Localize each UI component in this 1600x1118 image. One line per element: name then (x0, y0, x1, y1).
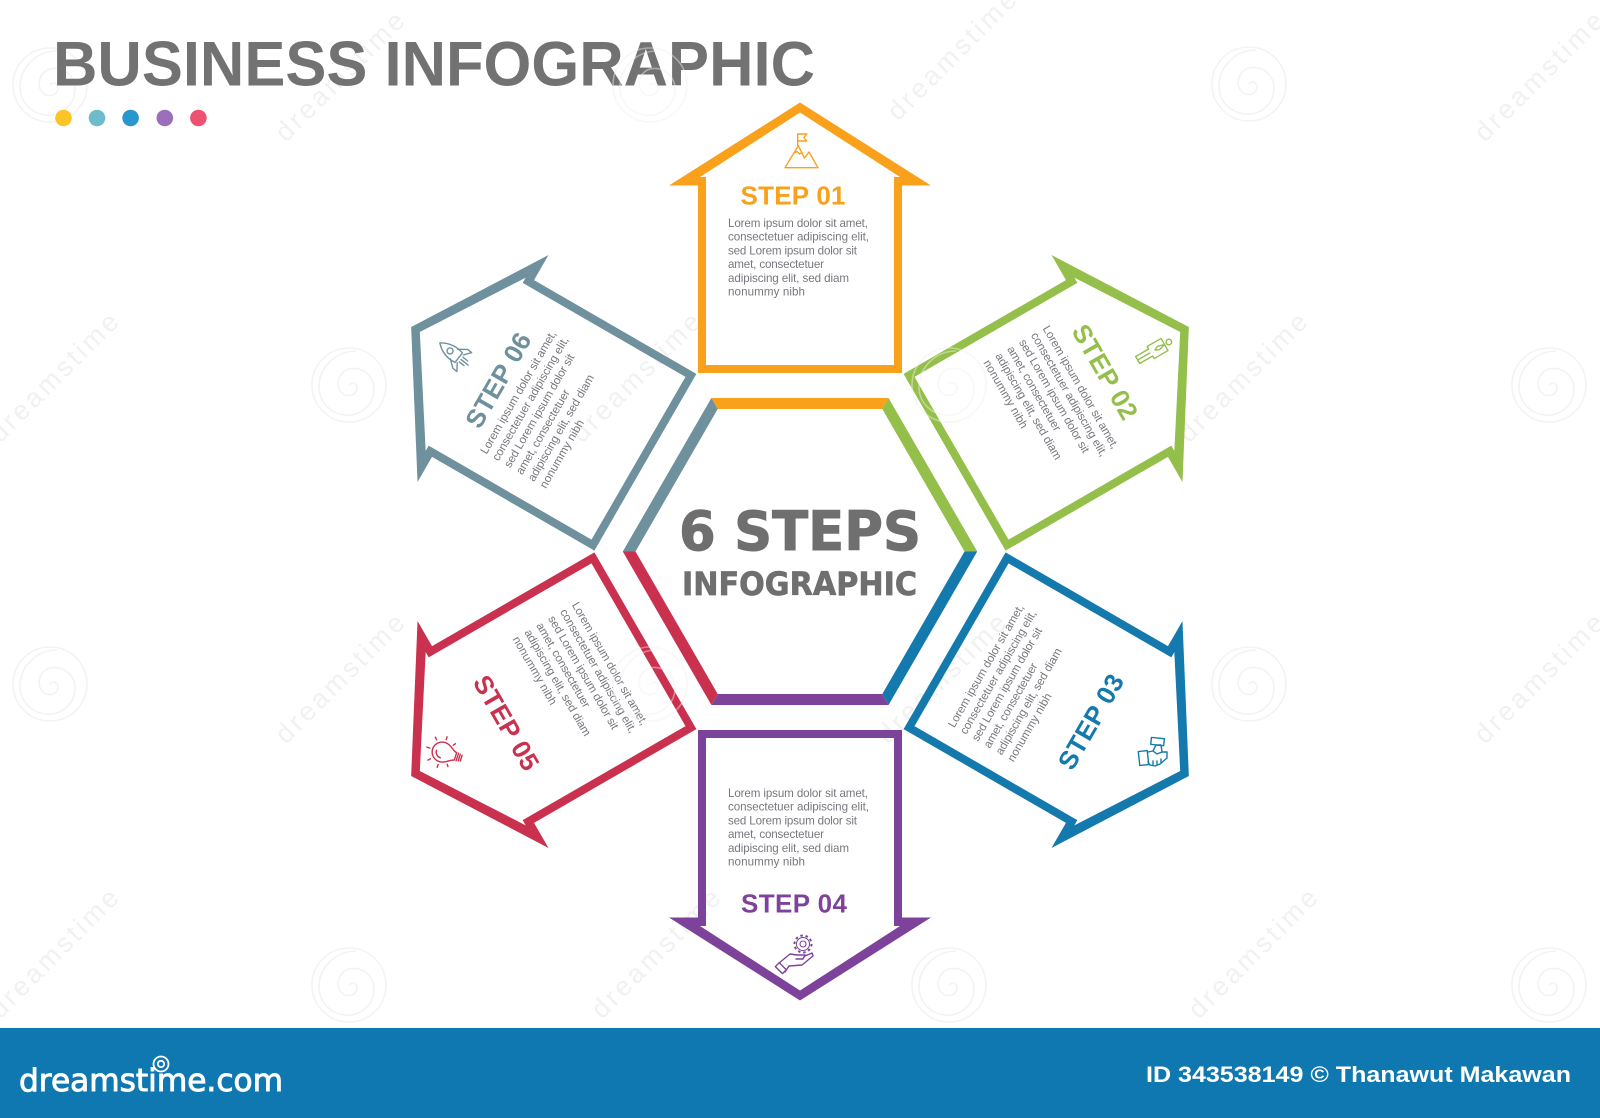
panel: step 06: adipiscing elit, sed diam (525, 372, 597, 484)
panel: step 05 (346, 527, 711, 889)
panel: step 02: amet, consectetuer (1004, 344, 1064, 434)
centre heading: 6 STEPS (679, 500, 921, 563)
panel: step 04 (669, 730, 931, 1000)
panel: step 04: amet, consectetuer (728, 828, 824, 841)
panel: step 05: sed Lorem ipsum dolor sit (545, 614, 621, 732)
watermark: dreamstime (269, 6, 410, 147)
footer credit: ID 343538149 © Thanawut Makawan (1146, 1062, 1571, 1087)
panel: step 06: consectetuer adipiscing elit, (490, 335, 572, 463)
panel: step 04: nonummy nibh (728, 856, 805, 868)
panel: step 01: STEP 01 (740, 180, 846, 210)
panel: step 02: STEP 02 (1066, 319, 1144, 425)
panel: step 01: Lorem ipsum dolor sit amet, (728, 217, 868, 230)
panel: step 04: adipiscing elit, sed diam (728, 842, 849, 855)
panel: step 01 (669, 102, 931, 373)
panel: step 02: Lorem ipsum dolor sit amet, (1040, 323, 1121, 451)
panel: step 02: adipiscing elit, sed diam (992, 351, 1064, 462)
colour dots (55, 110, 207, 126)
panel: step 06: Lorem ipsum dolor sit amet, (478, 329, 559, 456)
panel: step 06: STEP 06 (459, 327, 537, 433)
icon: hand with gear (775, 936, 813, 974)
centre heading (679, 500, 921, 603)
panel: step 01: consectetuer adipiscing elit, (728, 231, 869, 244)
title: BUSINESS INFOGRAPHIC (53, 30, 815, 100)
central hexagon (623, 398, 977, 705)
panel: step 03: consectetuer adipiscing elit, (957, 608, 1039, 737)
panel: step 03: nonummy nibh (1005, 691, 1055, 764)
icon: mountain flag (785, 134, 818, 168)
watermark: dreamstime (585, 883, 726, 1024)
panel: step 03 (889, 527, 1254, 889)
panel: step 03: sed Lorem ipsum dolor sit (969, 625, 1045, 744)
panel: step 03: Lorem ipsum dolor sit amet, (946, 602, 1027, 730)
icon: person (1134, 335, 1175, 366)
icon: handshake (1138, 737, 1167, 766)
panel: step 05: Lorem ipsum dolor sit amet, (569, 600, 650, 728)
panel: step 03: adipiscing elit, sed diam (993, 646, 1065, 757)
icon: rocket (432, 333, 476, 375)
panel: step 06: sed Lorem ipsum dolor sit (502, 351, 578, 470)
icon: light bulb (422, 732, 466, 773)
watermark: dreamstime (1172, 307, 1313, 448)
panel: step 05: consectetuer adipiscing elit, (557, 607, 639, 735)
watermark overlay (613, 48, 986, 721)
watermark: dreamstime (565, 307, 706, 448)
watermark: dreamstime (269, 608, 410, 749)
panel: step 06: nonummy nibh (537, 417, 587, 491)
panel: step 02: nonummy nibh (981, 358, 1030, 431)
panel: step 02: sed Lorem ipsum dolor sit (1016, 337, 1092, 456)
centre heading: INFOGRAPHIC (682, 565, 917, 603)
panel: step 03: STEP 03 (1052, 669, 1130, 775)
panel: step 04: STEP 04 (741, 888, 848, 918)
panel: step 01: sed Lorem ipsum dolor sit (728, 244, 858, 257)
panel: step 02 (889, 214, 1254, 576)
panel: step 06 (346, 214, 711, 576)
panel: step 05: adipiscing elit, sed diam (522, 627, 593, 739)
panel: step 04: sed Lorem ipsum dolor sit (728, 814, 858, 827)
panel: step 04: Lorem ipsum dolor sit amet, (728, 787, 868, 800)
panel: step 06: amet, consectetuer (513, 387, 573, 477)
panel: step 05: STEP 05 (467, 670, 546, 776)
panel: step 01: adipiscing elit, sed diam (728, 272, 849, 285)
panel: step 01: amet, consectetuer (728, 258, 824, 271)
panel: step 05: nonummy nibh (510, 634, 559, 707)
panel: step 03: amet, consectetuer (981, 661, 1041, 750)
panel: step 01: nonummy nibh (728, 286, 805, 298)
footer logo: dreamstime.com (19, 1063, 283, 1099)
panel: step 04: consectetuer adipiscing elit, (728, 801, 869, 814)
footer bar (0, 1028, 1600, 1118)
watermark: dreamstime (871, 608, 1012, 749)
panel: step 02: consectetuer adipiscing elit, (1028, 330, 1110, 459)
watermark: dreamstime (1182, 883, 1323, 1024)
panel: step 05: amet, consectetuer (533, 620, 593, 710)
